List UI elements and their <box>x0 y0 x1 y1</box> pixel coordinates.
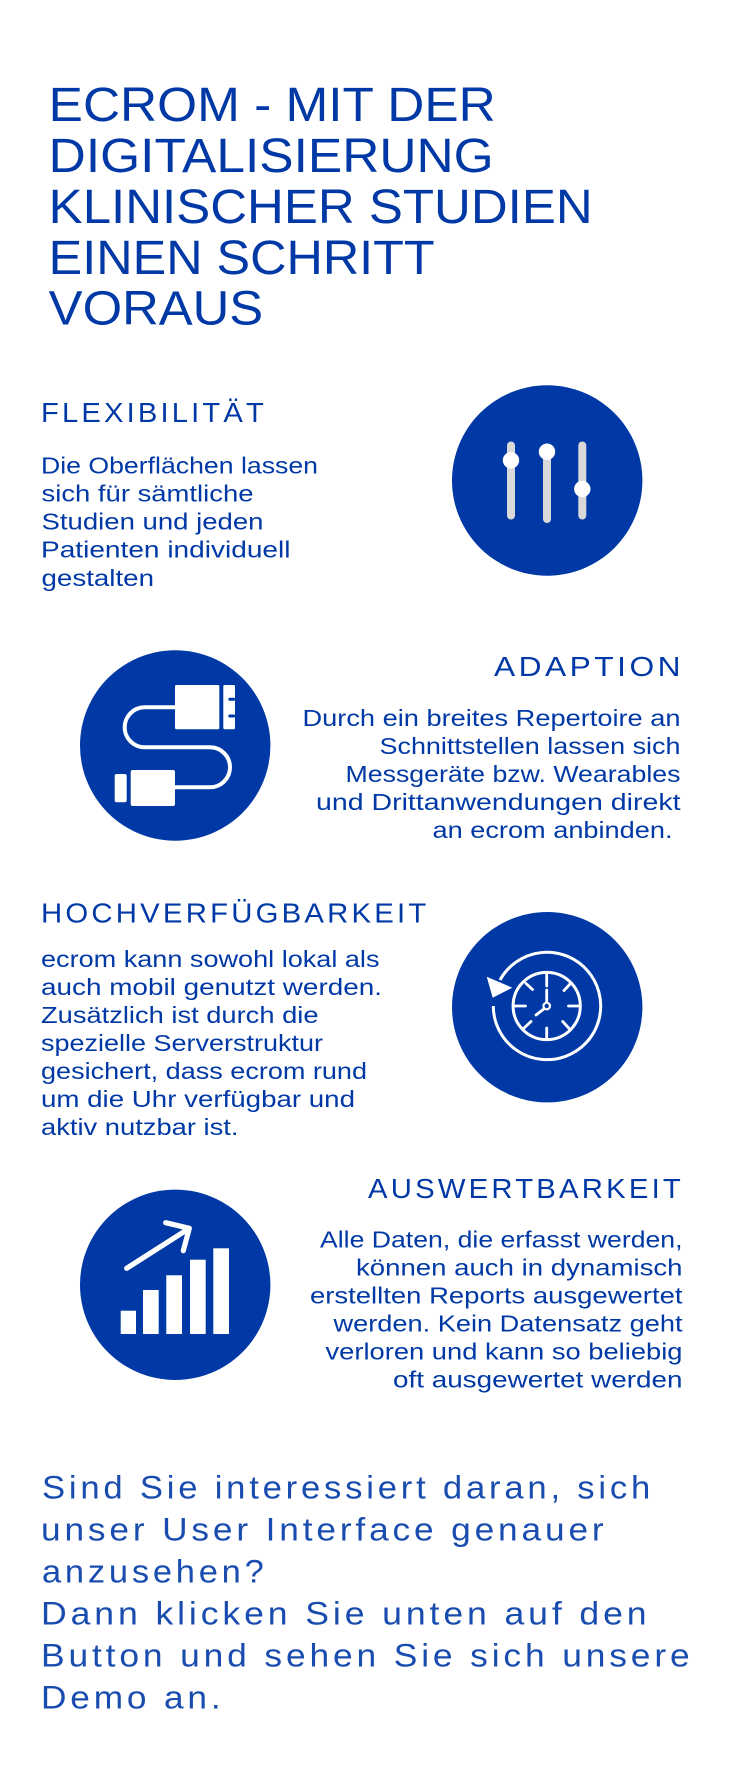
text block: Flexibilität: Patienten individuell <box>41 537 290 563</box>
call to action text <box>41 1470 694 1716</box>
text block: Flexibilität: gestalten <box>42 565 154 591</box>
panel: Flexibilität <box>41 385 642 591</box>
title: DIGITALISIERUNG <box>49 129 494 183</box>
heading: Adaption: ADAPTION <box>494 651 684 682</box>
heading: Hochverfügbarkeit: HOCHVERFÜGBARKEIT <box>41 897 430 928</box>
panel: Hochverfügbarkeit <box>41 897 642 1140</box>
text block: Auswertbarkeit: oft ausgewertet werden <box>393 1367 682 1393</box>
call to action text: Sind Sie interessiert daran, sich <box>42 1470 654 1506</box>
title: EINEN SCHRITT <box>49 231 435 285</box>
text block: Auswertbarkeit: Alle Daten, die erfasst werden, <box>320 1227 682 1253</box>
text block: Auswertbarkeit <box>310 1227 683 1393</box>
title: ECROM - MIT DER <box>49 78 496 132</box>
text block: Adaption <box>302 705 681 843</box>
text block: Adaption: an ecrom anbinden. <box>432 817 672 843</box>
heading: Auswertbarkeit: AUSWERTBARKEIT <box>368 1173 684 1204</box>
panel: Adaption <box>80 650 684 843</box>
text block: Flexibilität <box>41 452 318 591</box>
text block: Auswertbarkeit: verloren und kann so beliebig <box>326 1339 682 1365</box>
call to action text: Dann klicken Sie unten auf den <box>41 1596 650 1632</box>
text block: Flexibilität: Studien und jeden <box>42 509 264 535</box>
text block: Hochverfügbarkeit: spezielle Serverstruktur <box>41 1030 323 1056</box>
text block: Adaption: Messgeräte bzw. Wearables <box>346 761 680 787</box>
text block: Hochverfügbarkeit: um die Uhr verfügbar und <box>41 1086 355 1112</box>
text block: Hochverfügbarkeit <box>41 946 382 1140</box>
text block: Auswertbarkeit: erstellten Reports ausgewertet <box>310 1283 683 1309</box>
call to action text: Demo an. <box>41 1680 224 1716</box>
icon: cable plug <box>80 650 270 841</box>
text block: Hochverfügbarkeit: Zusätzlich ist durch die <box>41 1002 318 1028</box>
text block: Adaption: Durch ein breites Repertoire an <box>302 705 680 731</box>
text block: Flexibilität: sich für sämtliche <box>42 480 254 506</box>
call to action text: Button und sehen Sie sich unsere <box>41 1638 694 1674</box>
title: KLINISCHER STUDIEN <box>49 180 593 234</box>
title <box>49 78 593 336</box>
icon: growth chart <box>80 1190 270 1380</box>
title: VORAUS <box>49 282 263 336</box>
text block: Adaption: Schnittstellen lassen sich <box>380 733 680 759</box>
heading: Flexibilität: FLEXIBILITÄT <box>41 397 267 428</box>
text block: Hochverfügbarkeit: gesichert, dass ecrom rund <box>41 1058 367 1084</box>
call to action text: unser User Interface genauer <box>41 1512 608 1548</box>
text block: Flexibilität: Die Oberflächen lassen <box>41 452 318 478</box>
icon: sliders <box>452 385 642 576</box>
text block: Auswertbarkeit: werden. Kein Datensatz geht <box>332 1311 683 1337</box>
panel: Auswertbarkeit <box>80 1173 684 1393</box>
icon: clock with arrow <box>452 912 642 1102</box>
text block: Hochverfügbarkeit: ecrom kann sowohl lokal als <box>41 946 380 972</box>
text block: Hochverfügbarkeit: auch mobil genutzt werden. <box>41 974 382 1000</box>
text block: Hochverfügbarkeit: aktiv nutzbar ist. <box>41 1114 238 1140</box>
text block: Auswertbarkeit: können auch in dynamisch <box>356 1255 682 1281</box>
text block: Adaption: und Drittanwendungen direkt <box>316 789 681 815</box>
call to action text: anzusehen? <box>42 1554 268 1590</box>
